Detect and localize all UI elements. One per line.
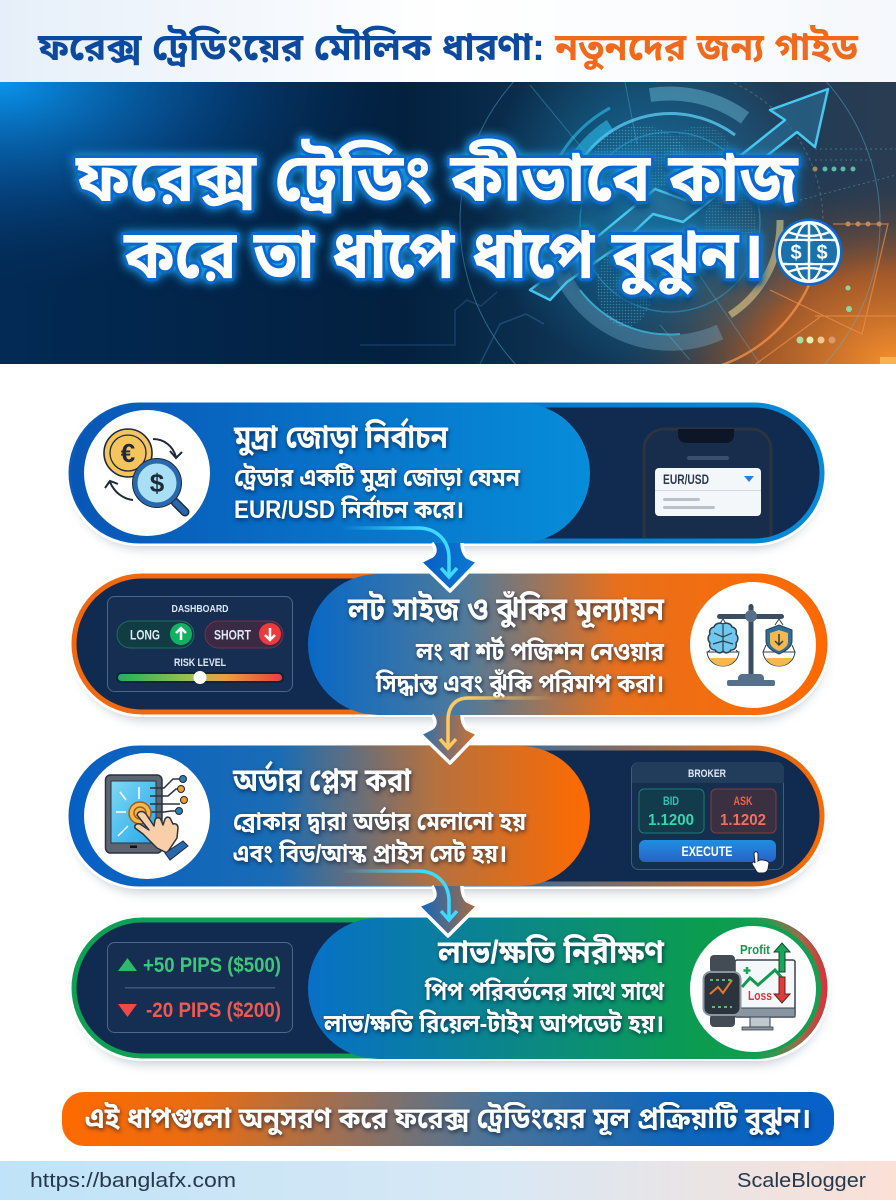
- step 2 text: [347, 591, 665, 699]
- step 3 icon: tablet touch: [84, 753, 210, 879]
- hero heading: ফরেক্স ট্রেডিং কীভাবে কাজ: [75, 139, 799, 216]
- phone mockup: EUR/USD: [663, 471, 709, 487]
- icon: dollar globe: $: [790, 242, 802, 264]
- step 3 text: ব্রোকার দ্বারা অর্ডার মেলানো হয়: [233, 806, 527, 836]
- pips panel: -20 PIPS ($200): [146, 999, 281, 1022]
- step 3 text: [232, 761, 527, 868]
- step 2 text: সিদ্ধান্ত এবং ঝুঁকি পরিমাপ করা।: [375, 669, 664, 699]
- dashboard panel: SHORT: [214, 626, 251, 642]
- footer brand: ScaleBlogger: [737, 1170, 866, 1192]
- step 4 text: [323, 934, 665, 1038]
- step 1 icon: currency search: €: [121, 438, 135, 468]
- dashboard panel: RISK LEVEL: [174, 657, 226, 669]
- step 3 text: এবং বিড/আস্ক প্রাইস সেট হয়।: [233, 839, 507, 868]
- hero heading: [75, 139, 799, 295]
- broker panel: BROKER: [688, 768, 726, 780]
- step 1 text: ট্রেডার একটি মুদ্রা জোড়া যেমন: [234, 463, 520, 493]
- footer url: https://banglafx.com: [30, 1170, 236, 1192]
- step 2 text: লং বা শর্ট পজিশন নেওয়ার: [415, 635, 665, 666]
- step 1 text: মুদ্রা জোড়া নির্বাচন: [233, 418, 449, 456]
- step 1 gradient pill: [71, 403, 590, 543]
- dashboard panel: [108, 596, 292, 692]
- broker panel: [632, 762, 784, 873]
- step 4 icon: profit loss monitor: Loss: [748, 988, 772, 1003]
- step 3 gradient pill: [71, 746, 590, 886]
- page title: ফরেক্স ট্রেডিংয়ের মৌলিক ধারণা: নতুনদের জন্য গাইড: [37, 25, 859, 71]
- step 3 card: [66, 744, 827, 893]
- step 1 text: [233, 418, 520, 524]
- broker panel: ASK: [734, 794, 753, 808]
- dashboard panel: DASHBOARD: [172, 604, 228, 615]
- bottom summary banner: [62, 1092, 834, 1146]
- step 1 icon: currency search: [84, 410, 210, 536]
- step 4 icon: profit loss monitor: Profit: [740, 942, 771, 957]
- hero technology rings and arrow: [360, 82, 896, 364]
- step 4 text: লাভ/ক্ষতি রিয়েল-টাইম আপডেট হয়।: [323, 1009, 664, 1038]
- page header band: [0, 0, 896, 82]
- step 4 red rim: [311, 920, 824, 1056]
- step 4 card: [69, 916, 830, 1065]
- step 3 text: অর্ডার প্লেস করা: [232, 761, 412, 798]
- step 1 icon: currency search: $: [150, 468, 165, 498]
- bottom summary banner: এই ধাপগুলো অনুসরণ করে ফরেক্স ট্রেডিংয়ের মূল প্রক্রিয়াটি বুঝুন।: [85, 1102, 811, 1136]
- arrow: step 1 to step 2: [341, 528, 478, 591]
- step 2 icon: risk scale: [690, 582, 816, 708]
- hero banner: [0, 82, 896, 364]
- broker panel: EXECUTE: [682, 843, 732, 859]
- step 4 text: লাভ/ক্ষতি নিরীক্ষণ: [437, 934, 665, 970]
- step 2 text: লট সাইজ ও ঝুঁকির মূল্যায়ন: [347, 591, 665, 629]
- footer bar: [0, 1161, 896, 1200]
- step 1 text: EUR/USD নির্বাচন করে।: [234, 494, 464, 524]
- step 4 icon: profit loss monitor: [690, 926, 816, 1052]
- dashboard panel: LONG: [130, 626, 160, 642]
- step 2 gradient pill: [308, 574, 826, 715]
- arrow: step 3 to step 4: [341, 871, 478, 936]
- step 4 text: পিপ পরিবর্তনের সাথে সাথে: [424, 976, 664, 1006]
- step 2 card: [69, 572, 830, 721]
- pips panel: +50 PIPS ($500): [143, 954, 281, 977]
- arrow: step 2 to step 3: [420, 698, 555, 763]
- broker panel: 1.1202: [720, 812, 766, 829]
- step 4 gradient pill: [308, 918, 826, 1059]
- step 1 card: [68, 402, 826, 554]
- cursor hand: [752, 852, 769, 873]
- icon: dollar globe: [777, 220, 841, 284]
- pips panel: [108, 942, 292, 1032]
- broker panel: 1.1200: [648, 812, 694, 829]
- broker panel: BID: [663, 794, 679, 808]
- icon: dollar globe: $: [816, 242, 828, 264]
- hero heading: করে তা ধাপে ধাপে বুঝুন।: [123, 217, 764, 295]
